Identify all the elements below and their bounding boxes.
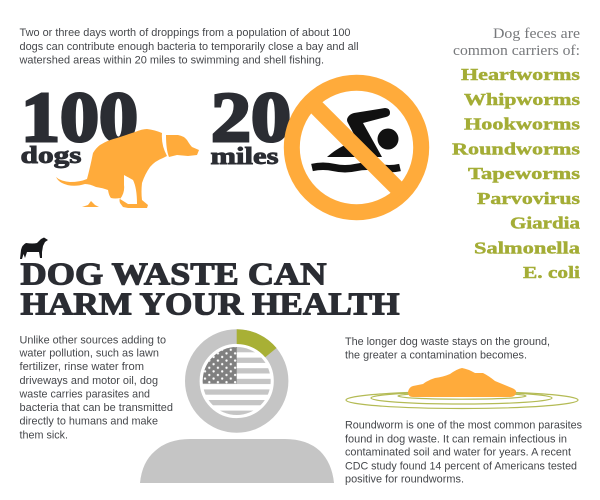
text: roundworm: Roundworm is one of the most common parasites <box>345 419 582 431</box>
text: other sources <box>19 334 173 441</box>
intro text: dogs can contribute enough bacteria to temporarily close a bay and all <box>20 41 358 53</box>
intro text <box>19 27 358 66</box>
list of carriers: Parvovirus <box>477 189 580 208</box>
flag <box>202 347 271 415</box>
text: roundworm: found in dog waste. It can remain infectious in <box>345 433 567 445</box>
list of carriers: Salmonella <box>474 238 581 257</box>
text: other sources: Unlike other sources adding to <box>20 334 166 346</box>
text: other sources: fertilizer, rinse water from <box>20 361 144 373</box>
text: roundworm <box>345 419 582 486</box>
text: other sources: directly to humans and make <box>20 416 158 428</box>
title <box>20 256 400 322</box>
text: other sources: bacteria that can be transmitted <box>20 402 173 414</box>
list of carriers: Whipworms <box>464 90 580 109</box>
text: other sources: water pollution, such as lawn <box>19 348 159 360</box>
stat: 20 miles: miles <box>210 144 278 170</box>
text: other sources: them sick. <box>20 429 68 441</box>
intro text: Two or three days worth of droppings from a population of about 100 <box>20 27 350 39</box>
intro text: watershed areas within 20 miles to swimming and shell fishing. <box>19 54 324 66</box>
text: contamination: the greater a contamination becomes. <box>345 350 527 362</box>
text: roundworm: contaminated soil and water for years. A recent <box>345 447 571 459</box>
title: DOG WASTE CAN <box>20 256 326 292</box>
list of carriers: Hookworms <box>464 114 580 134</box>
chart: person with 14 percent flag donut <box>140 329 334 483</box>
text: contamination <box>345 336 550 362</box>
list of carriers <box>452 65 581 282</box>
carriers intro: common carriers of: <box>453 43 580 59</box>
icon: small dog <box>20 238 48 259</box>
text: roundworm: CDC study found 14 percent of Americans tested <box>345 460 577 472</box>
text: roundworm: positive for roundworms. <box>345 474 464 486</box>
carriers intro <box>453 26 580 59</box>
person shoulders <box>140 439 334 483</box>
text: other sources: waste carries parasites and <box>19 389 150 401</box>
list of carriers: Giardia <box>510 214 581 232</box>
text: other sources: driveways and motor oil, dog <box>20 375 158 387</box>
stat: 100 dogs: 100 <box>21 79 138 157</box>
donut ring <box>192 337 281 425</box>
icon: waste pile with contamination rings <box>346 368 578 408</box>
list of carriers: Heartworms <box>461 65 580 84</box>
carriers intro: Dog feces are <box>493 26 580 42</box>
text: contamination: The longer dog waste stays on the ground, <box>345 336 550 348</box>
list of carriers: E. coli <box>523 263 580 282</box>
donut 14 percent segment <box>237 329 276 357</box>
title: HARM YOUR HEALTH <box>20 286 400 322</box>
icon: squatting dog <box>56 129 199 208</box>
icon: no swimming sign <box>292 83 421 212</box>
list of carriers: Tapeworms <box>468 164 580 183</box>
stat: 100 dogs: dogs <box>20 143 82 169</box>
list of carriers: Roundworms <box>452 139 580 158</box>
stat: 20 miles: 20 <box>211 79 291 157</box>
